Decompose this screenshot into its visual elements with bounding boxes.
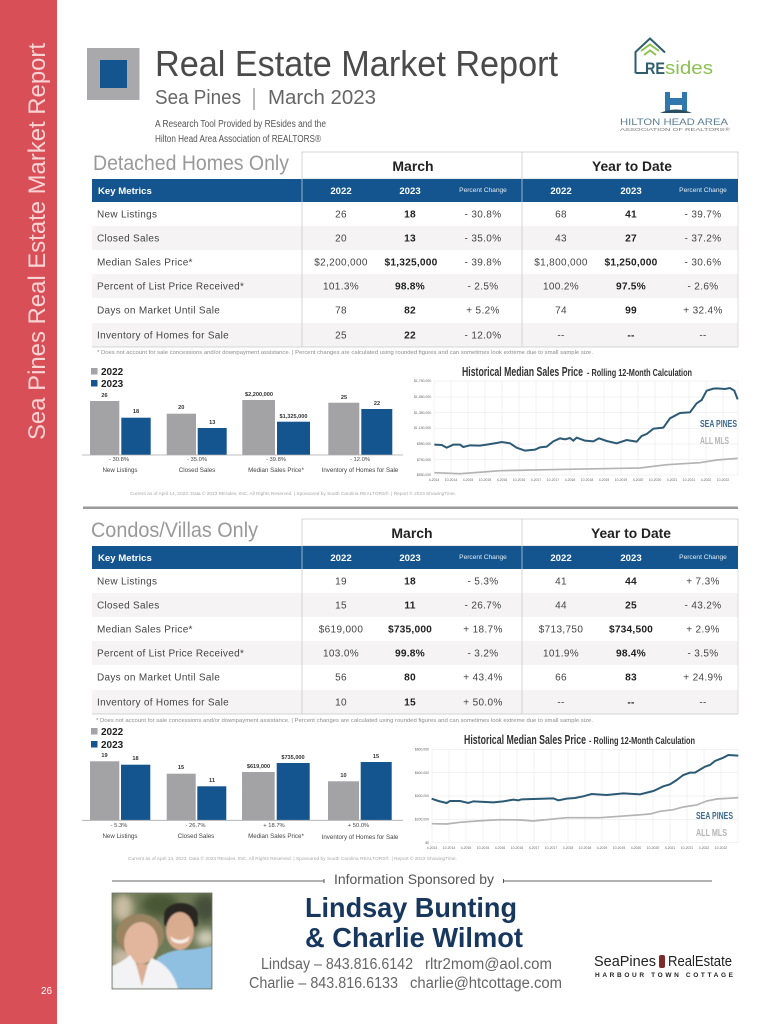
footnote: condos: * Does not account for sale concessions and/or downpayment assistance. | Percent changes are calculated using rounded figures and can sometimes look extreme due to small sample size. <box>96 718 593 724</box>
bar chart: condos: $735,000 <box>281 755 305 761</box>
line chart: detached: ALL MLS <box>700 436 729 447</box>
line chart: detached: 10-2019 <box>615 478 627 482</box>
table: condos: 18 <box>404 576 416 588</box>
table: condos: + 50.0% <box>463 698 503 708</box>
table: condos: Closed Sales <box>97 600 160 612</box>
table: detached homes: 2022 <box>550 186 572 197</box>
sponsor contacts: rltr2mom@aol.com <box>425 956 552 973</box>
table: condos: - 3.5% <box>687 648 719 660</box>
table: condos: + 18.7% <box>463 624 503 636</box>
legend: condos bars: 2022 <box>101 727 124 738</box>
table: detached homes: 98.8% <box>395 282 425 292</box>
line chart: condos: 4-2015 <box>461 846 471 850</box>
sidebar title: Sea Pines Real Estate Market Report <box>24 43 51 440</box>
line chart: condos: 10-2022 <box>715 846 727 850</box>
table: condos: 2022 <box>330 553 352 564</box>
table: condos: 2023 <box>620 553 642 564</box>
table: condos: 10 <box>335 698 347 708</box>
chart title: condos: - Rolling 12-Month Calculation <box>589 736 695 747</box>
bar chart: detached: Median Sales Price* <box>248 467 304 474</box>
sponsor contacts: charlie@htcottage.com <box>410 975 562 992</box>
bar chart: condos: New Listings <box>102 833 138 840</box>
legend: detached bars: 2022 <box>101 367 124 378</box>
bar chart: condos: 15 <box>373 754 379 760</box>
sponsor contacts: Lindsay – 843.816.6142 <box>261 956 413 973</box>
table: detached homes: Inventory of Homes for Sale <box>97 330 229 342</box>
bar chart: detached: Inventory of Homes for Sale <box>322 467 399 474</box>
logo: Sea Pines Real Estate <box>594 953 734 979</box>
legend: condos bars: 2023 <box>101 740 124 751</box>
logo: Hilton Head Area <box>620 92 731 132</box>
line chart: detached: 4-2017 <box>531 478 541 482</box>
table: condos: 101.9% <box>543 648 579 660</box>
line chart: detached: 10-2021 <box>683 478 695 482</box>
table: detached homes: 2022 <box>330 186 352 197</box>
intro text: Hilton Head Area Association of REALTORS® <box>155 134 322 145</box>
line chart: detached: 4-2016 <box>497 478 507 482</box>
panel: red sidebar <box>0 0 57 1024</box>
bar chart: condos: - 26.7% <box>186 823 205 829</box>
subtitle: Sea Pines <box>155 86 241 109</box>
line chart: detached: 10-2016 <box>513 478 525 482</box>
bar chart: detached: Closed Sales <box>179 467 215 474</box>
table: condos: + 2.9% <box>686 624 720 636</box>
line chart: detached: 4-2021 <box>667 478 677 482</box>
table: detached homes: 26 <box>335 210 347 220</box>
bar chart: detached: New Listings <box>102 467 138 474</box>
line chart: condos: 10-2016 <box>511 846 523 850</box>
bar chart: detached: - 30.8% <box>109 457 129 463</box>
line chart: detached: 4-2018 <box>565 478 575 482</box>
table: condos: 99.8% <box>395 648 425 660</box>
line chart: condos: $400,000 <box>415 794 429 798</box>
table: condos: - 3.2% <box>467 648 499 660</box>
line chart: detached: 10-2014 <box>445 478 457 482</box>
table: condos: 41 <box>555 576 567 588</box>
heading: condos: Condos/Villas Only <box>91 518 258 542</box>
table: condos: Percent Change <box>459 554 507 561</box>
bar chart: condos: Inventory of Homes for Sale <box>322 834 399 841</box>
table: detached homes: + 32.4% <box>683 306 723 316</box>
table: condos: Key Metrics <box>98 553 152 564</box>
table: detached homes: 101.3% <box>323 282 359 292</box>
sponsor rule and label: Information Sponsored by <box>334 872 494 887</box>
table: detached homes: New Listings <box>97 210 157 220</box>
bar chart: detached: 13 <box>209 420 215 426</box>
credit line: detached: Current as of April 14, 2023. Data © 2023 REsides, INC. All Rights Reserved. | Sponsored by South Carolina REALTORS®. | Report © 2023 ShowingTime. <box>130 491 456 496</box>
bar chart: detached: - 35.0% <box>187 457 207 463</box>
table: condos: 56 <box>335 672 347 684</box>
table: detached homes: 99 <box>625 306 637 316</box>
table: detached homes: - 12.0% <box>465 330 501 342</box>
table: detached homes: -- <box>627 330 635 342</box>
line chart: detached: 4-2019 <box>599 478 609 482</box>
bar chart: detached: 18 <box>133 409 139 415</box>
table: condos: 66 <box>555 672 567 684</box>
table: condos: -- <box>557 698 565 708</box>
table: detached homes: 2023 <box>620 186 642 197</box>
line chart: detached: 10-2020 <box>649 478 661 482</box>
line chart: detached: 10-2015 <box>479 478 491 482</box>
line chart: condos: 4-2018 <box>563 846 573 850</box>
credit line: condos: Current as of April 14, 2023. Data © 2023 REsides, INC. All Rights Reserved. | Sponsored by South Carolina REALTORS®. | Report © 2023 ShowingTime. <box>128 856 457 861</box>
table: condos: $735,000 <box>388 624 432 636</box>
table: detached homes: $2,200,000 <box>314 258 368 268</box>
table: condos: 83 <box>625 672 637 684</box>
logo: REsides: sides <box>665 58 713 78</box>
line chart: condos: 4-2021 <box>665 846 675 850</box>
legend: detached bars <box>91 367 124 390</box>
line chart: condos: ALL MLS <box>696 828 727 839</box>
bar chart: condos: 18 <box>132 756 139 762</box>
table: detached homes: 78 <box>335 306 347 316</box>
line chart: condos: 4-2017 <box>529 846 539 850</box>
bar chart: condos: Median Sales Price* <box>248 833 304 840</box>
table: condos: Inventory of Homes for Sale <box>97 698 229 708</box>
table: detached homes: - 30.8% <box>465 210 501 220</box>
table: detached homes: 97.5% <box>616 282 646 292</box>
bar chart: condos: 10 <box>340 773 347 779</box>
table: detached homes: 68 <box>555 210 567 220</box>
line chart: detached: SEA PINES <box>700 419 737 430</box>
legend: detached bars: 2023 <box>101 379 124 390</box>
table: condos: 2022 <box>550 553 572 564</box>
line chart: detached: $1,750,000 <box>414 379 431 383</box>
table: detached homes: Closed Sales <box>97 234 160 244</box>
logo: Sea Pines Real Estate: SeaPines <box>594 953 656 970</box>
footnote: detached: * Does not account for sale concessions and/or downpayment assistance. | Percent changes are calculated using rounded figures and can sometimes look extreme due to small sample size. <box>97 350 593 356</box>
table: detached homes: - 2.6% <box>687 282 719 292</box>
table: condos: 11 <box>404 600 416 612</box>
sponsor names: & Charlie Wilmot <box>305 922 523 953</box>
line chart: detached <box>414 379 738 482</box>
table: condos: Percent Change <box>679 554 727 561</box>
line chart: condos: 4-2019 <box>597 846 607 850</box>
line chart: detached: 4-2015 <box>463 478 473 482</box>
logo: Sea Pines Real Estate: RealEstate <box>668 953 732 970</box>
table: condos: 103.0% <box>323 648 359 660</box>
table: detached homes: - 39.8% <box>465 258 501 268</box>
table: condos: + 7.3% <box>686 576 720 588</box>
table: condos: 98.4% <box>616 648 646 660</box>
subtitle <box>155 86 376 110</box>
table: condos: 44 <box>625 576 637 588</box>
bar chart: condos: Closed Sales <box>178 833 214 840</box>
table: detached homes: Percent Change <box>459 187 507 194</box>
logo: REsides: RE <box>645 59 665 78</box>
bar chart: detached: - 12.0% <box>350 457 370 463</box>
logo: Hilton Head Area: ASSOCIATION OF REALTORS® <box>620 127 731 132</box>
line chart: condos: 4-2020 <box>631 846 641 850</box>
logo: Hilton Head Area: HILTON HEAD AREA <box>620 117 729 128</box>
bar chart: condos <box>82 753 403 841</box>
chart title: detached: - Rolling 12-Month Calculation <box>587 368 692 379</box>
table: detached homes: -- <box>699 330 707 342</box>
bar chart: condos: + 18.7% <box>263 823 285 829</box>
line chart: condos: 4-2016 <box>495 846 505 850</box>
table: condos: + 43.4% <box>463 672 503 684</box>
logo: REsides <box>636 38 713 78</box>
bar chart: detached: 20 <box>178 405 184 411</box>
line chart: condos: $800,000 <box>415 748 429 752</box>
line chart: detached: 10-2017 <box>547 478 559 482</box>
table: detached homes: 25 <box>335 330 347 342</box>
line chart: condos: 10-2018 <box>579 846 591 850</box>
bar chart: condos: 15 <box>178 765 184 771</box>
table: detached homes: 100.2% <box>543 282 579 292</box>
line chart: condos: 10-2017 <box>545 846 557 850</box>
bar chart: detached: - 39.8% <box>266 457 286 463</box>
table: condos: $734,500 <box>609 624 653 636</box>
line chart: detached: 10-2022 <box>717 478 729 482</box>
table: detached homes: Percent Change <box>679 187 727 194</box>
table: detached homes: 27 <box>625 234 637 244</box>
table: condos: 44 <box>555 600 567 612</box>
line chart: condos: $200,000 <box>415 818 429 822</box>
table: detached homes: 43 <box>555 234 567 244</box>
chart title: detached: Historical Median Sales Price <box>462 364 583 379</box>
line chart: detached: $950,000 <box>417 442 431 446</box>
bar chart: condos: 19 <box>101 753 108 759</box>
table: condos: Year to Date <box>591 525 671 541</box>
table: condos: 25 <box>625 600 637 612</box>
bar chart: condos: + 50.0% <box>348 823 369 829</box>
line chart: condos: SEA PINES <box>696 811 733 822</box>
line chart: condos <box>415 748 738 850</box>
sponsor contacts: Charlie – 843.816.6133 <box>249 975 398 992</box>
line chart: condos: 10-2020 <box>647 846 659 850</box>
table: detached homes: - 2.5% <box>467 282 499 292</box>
table: detached homes: 74 <box>555 306 567 316</box>
table: condos: $713,750 <box>539 624 583 636</box>
line chart: condos: $0 <box>425 841 429 845</box>
sponsor rule and label <box>112 872 712 887</box>
table: detached homes: Percent of List Price Received* <box>97 282 244 292</box>
table: detached homes: 82 <box>404 306 416 316</box>
table: detached homes: $1,800,000 <box>534 258 588 268</box>
legend: condos bars <box>91 727 124 751</box>
table: detached homes: - 39.7% <box>685 210 721 220</box>
table: detached homes: 18 <box>404 210 416 220</box>
line chart: condos: 10-2019 <box>613 846 625 850</box>
table: condos: -- <box>699 698 707 708</box>
table: detached homes: -- <box>557 330 565 342</box>
bar chart: detached: $1,325,000 <box>280 414 308 420</box>
heading: detached homes: Detached Homes Only <box>93 151 289 175</box>
table: detached homes <box>92 152 738 347</box>
title: Real Estate Market Report <box>155 43 558 84</box>
intro text: A Research Tool Provided by REsides and the <box>155 119 326 130</box>
table: detached homes: 22 <box>404 330 416 342</box>
table: detached homes: - 35.0% <box>465 234 501 244</box>
table: condos: - 26.7% <box>465 600 501 612</box>
intro text <box>155 119 326 145</box>
table: detached homes: Key Metrics <box>98 186 152 197</box>
line chart: condos: 4-2014 <box>427 846 437 850</box>
bar chart: detached: 22 <box>374 401 380 407</box>
photo: agents <box>112 893 217 989</box>
table: condos: - 5.3% <box>467 576 499 588</box>
page number: 26 <box>41 986 53 997</box>
table: detached homes: - 37.2% <box>685 234 721 244</box>
table: detached homes: + 5.2% <box>466 306 500 316</box>
table: condos: March <box>391 525 433 541</box>
bar chart: detached <box>82 392 403 474</box>
table: condos: 15 <box>335 600 347 612</box>
line chart: detached: $1,150,000 <box>414 426 431 430</box>
line chart: condos: 4-2022 <box>699 846 709 850</box>
line chart: detached: $1,550,000 <box>414 395 431 399</box>
line chart: detached: 10-2018 <box>581 478 593 482</box>
line chart: condos: 10-2015 <box>477 846 489 850</box>
table: detached homes: 13 <box>404 234 416 244</box>
sponsor names: Lindsay Bunting <box>305 892 517 923</box>
line chart: condos: 10-2021 <box>681 846 693 850</box>
table: condos: 80 <box>404 672 416 684</box>
table: condos: $619,000 <box>319 624 363 636</box>
bar chart: condos: - 5.3% <box>111 823 127 829</box>
table: detached homes: - 30.6% <box>685 258 721 268</box>
table: condos: -- <box>627 698 635 708</box>
bar chart: condos: 11 <box>209 778 215 784</box>
bar chart: condos: $619,000 <box>247 764 270 770</box>
bar chart: detached: 25 <box>341 395 347 401</box>
table: condos: - 43.2% <box>685 600 721 612</box>
line chart: detached: 4-2020 <box>633 478 643 482</box>
logo: Sea Pines Real Estate: HARBOUR TOWN COTTAGE <box>595 972 734 979</box>
table: condos: 2023 <box>399 553 421 564</box>
table: condos: Days on Market Until Sale <box>97 672 220 684</box>
line chart: detached: $1,350,000 <box>414 411 431 415</box>
table: detached homes: $1,250,000 <box>604 258 658 268</box>
table: condos: New Listings <box>97 576 157 588</box>
table: detached homes: 41 <box>625 210 637 220</box>
table: condos: 15 <box>404 698 416 708</box>
table: detached homes: Days on Market Until Sale <box>97 306 220 316</box>
table: detached homes: $1,325,000 <box>384 258 438 268</box>
line chart: detached: 4-2014 <box>429 478 439 482</box>
bar chart: detached: 26 <box>101 393 108 399</box>
table: condos <box>92 519 738 714</box>
table: detached homes: 20 <box>335 234 347 244</box>
table: condos: Percent of List Price Received* <box>97 648 244 660</box>
chart title: condos: Historical Median Sales Price <box>464 732 586 747</box>
table: condos: + 24.9% <box>683 672 723 684</box>
table: detached homes: Year to Date <box>592 158 672 174</box>
line chart: detached: $550,000 <box>417 473 431 477</box>
table: condos: 19 <box>335 576 347 588</box>
table: condos: Median Sales Price* <box>97 624 193 636</box>
sponsor names <box>305 892 523 953</box>
sponsor contacts <box>249 956 562 992</box>
table: detached homes: Median Sales Price* <box>97 258 193 268</box>
line chart: condos: $600,000 <box>415 771 429 775</box>
icon: report square <box>87 48 140 100</box>
subtitle: March 2023 <box>268 86 376 109</box>
table: detached homes: 2023 <box>399 186 421 197</box>
bar chart: detached: $2,200,000 <box>245 392 273 398</box>
line chart: condos: 10-2014 <box>443 846 455 850</box>
line chart: detached: 4-2022 <box>701 478 711 482</box>
table: detached homes: March <box>392 158 434 174</box>
line chart: detached: $750,000 <box>417 458 431 462</box>
